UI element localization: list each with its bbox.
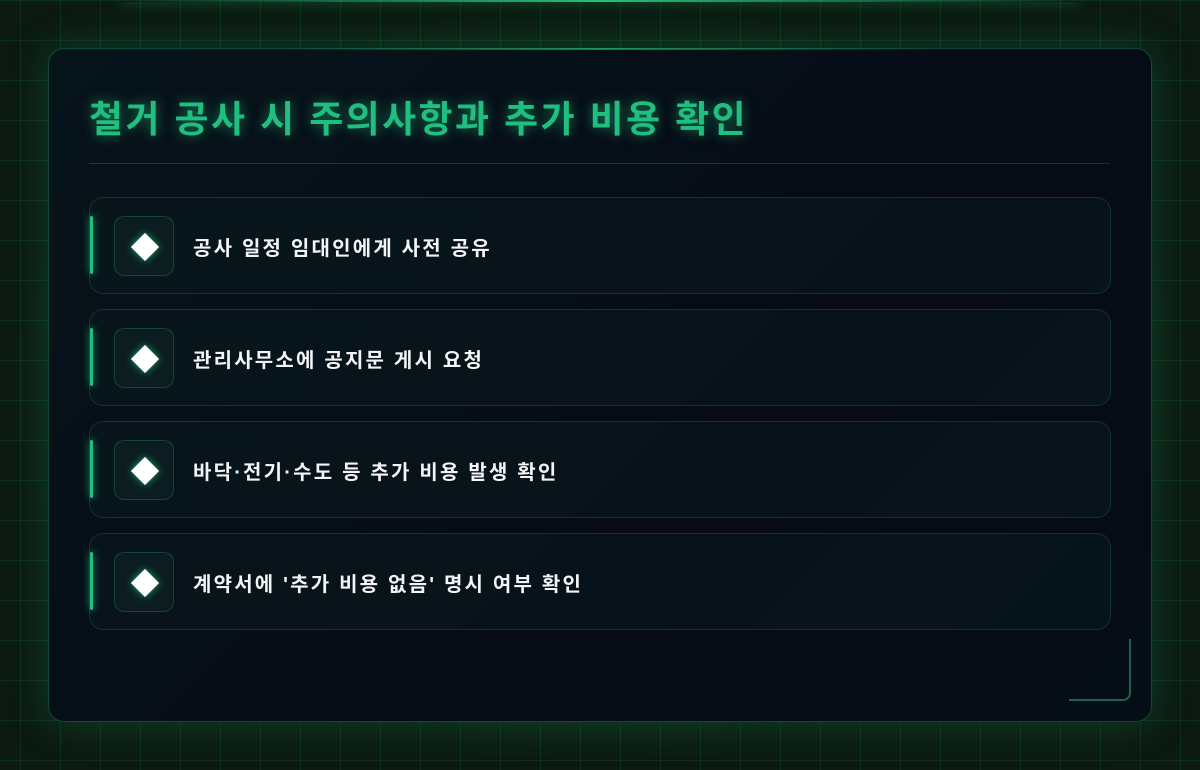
- item 3: [89, 421, 1111, 518]
- item 1: [89, 197, 1111, 294]
- title: 철거 공사 시 주의사항과 추가 비용 확인: [89, 99, 748, 140]
- text 4: 계약서에 '추가 비용 없음' 명시 여부 확인: [193, 574, 583, 596]
- text 1: 공사 일정 임대인에게 사전 공유: [193, 238, 492, 260]
- icon: diamond: [114, 440, 174, 500]
- item 2: [89, 309, 1111, 406]
- icon: diamond: [114, 552, 174, 612]
- icon: diamond: [114, 328, 174, 388]
- item 4: [89, 533, 1111, 630]
- text 3: 바닥·전기·수도 등 추가 비용 발생 확인: [193, 462, 559, 484]
- icon: diamond: [114, 216, 174, 276]
- text 2: 관리사무소에 공지문 게시 요청: [193, 350, 484, 372]
